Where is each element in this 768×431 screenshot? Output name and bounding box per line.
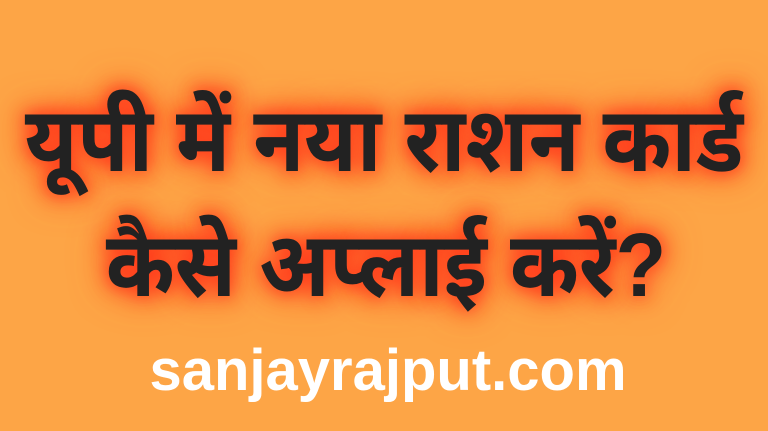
title line 1: यूपी में नया राशन कार्ड (25, 89, 743, 191)
website url: sanjayrajput.com (149, 338, 627, 403)
title line 2: कैसे अप्लाई करें? (106, 214, 666, 316)
